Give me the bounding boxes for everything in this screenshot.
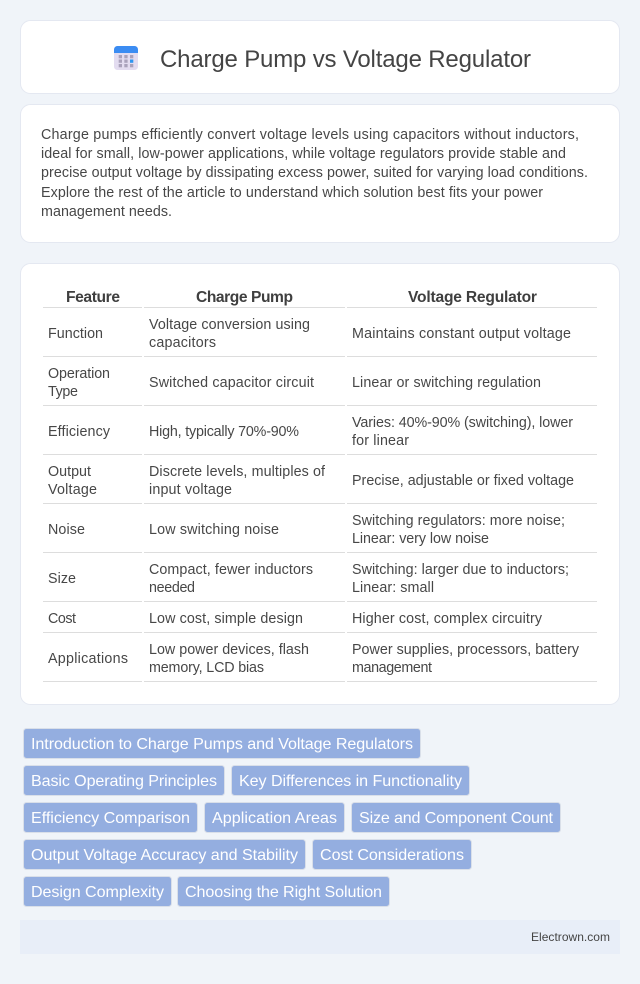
row: cost: Higher cost, complex circuitry — [352, 611, 543, 627]
tag: choosing the right solution — [178, 876, 390, 906]
row: cost: Low cost, simple design — [149, 611, 303, 627]
panel: header — [20, 20, 620, 94]
tag: design complexity — [24, 876, 172, 906]
tag: output voltage accuracy — [24, 840, 306, 870]
table header — [66, 289, 537, 306]
row: operation type — [48, 366, 541, 400]
intro paragraph: precise output voltage by dissipating excess power, suited for varying load conditions. — [41, 165, 588, 181]
tag: introduction: Introduction to Charge Pumps and Voltage Regulators — [31, 735, 413, 753]
row: output voltage: Precise, adjustable or fixed voltage — [352, 473, 574, 489]
row: function: Maintains constant output voltage — [352, 326, 571, 342]
intro paragraph: management needs. — [41, 204, 172, 220]
tag: cost considerations — [312, 840, 472, 870]
row: function: Voltage conversion using — [149, 317, 310, 333]
row: efficiency: Efficiency — [48, 424, 111, 440]
row: applications: management — [352, 660, 432, 676]
table header: Voltage Regulator — [408, 289, 537, 306]
table grid lines — [43, 307, 597, 682]
intro paragraph — [41, 127, 588, 220]
panel: intro text — [20, 104, 620, 242]
tag: size and component count: Size and Component Count — [359, 809, 554, 827]
row: function — [48, 317, 571, 351]
row: cost: Cost — [48, 611, 76, 627]
row: noise: Low switching noise — [149, 522, 279, 538]
row: efficiency: Varies: 40%-90% (switching), lower — [352, 415, 573, 431]
tag: key differences — [232, 766, 470, 796]
tag: application areas: Application Areas — [212, 809, 337, 827]
row: output voltage: Voltage — [48, 482, 97, 498]
row: noise — [48, 513, 565, 547]
row: output voltage: Output — [48, 464, 91, 480]
panel: comparison table — [20, 264, 620, 704]
tag: efficiency comparison — [24, 802, 198, 832]
row: size: Linear: small — [352, 580, 434, 596]
title: Charge Pump vs Voltage Regulator — [160, 46, 531, 73]
row: noise: Noise — [48, 522, 85, 538]
tag: output voltage accuracy: Output Voltage Accuracy and Stability — [31, 846, 299, 864]
tag: application areas — [204, 802, 344, 832]
row: operation type: Switched capacitor circuit — [149, 375, 314, 391]
row: size: Switching: larger due to inductors; — [352, 562, 569, 578]
row: output voltage: input voltage — [149, 482, 232, 498]
row: operation type: Type — [48, 384, 78, 400]
footer — [20, 920, 620, 954]
row: function: Function — [48, 326, 103, 342]
table header: Feature — [66, 289, 120, 306]
row: size: Size — [48, 571, 76, 587]
row: function: capacitors — [149, 335, 216, 351]
row: efficiency: High, typically 70%-90% — [149, 424, 299, 440]
row: size — [48, 562, 569, 596]
table header: Charge Pump — [196, 289, 293, 306]
icon: calendar — [114, 46, 138, 70]
intro paragraph: Charge pumps efficiently convert voltage levels using capacitors without inductors, — [41, 127, 579, 143]
row: noise: Linear: very low noise — [352, 531, 489, 547]
tag: basic operating principles — [24, 766, 224, 796]
intro paragraph: Explore the rest of the article to understand which solution best fits your power — [41, 185, 543, 201]
row: output voltage — [48, 464, 574, 498]
row: applications: memory, LCD bias — [149, 660, 264, 676]
panel: topic tags — [24, 728, 560, 906]
tag: key differences: Key Differences in Functionality — [239, 772, 463, 790]
row: operation type: Linear or switching regulation — [352, 375, 541, 391]
row: efficiency — [48, 415, 573, 449]
footer: Electrown.com — [531, 930, 610, 944]
row: size: Compact, fewer inductors — [149, 562, 313, 578]
row: output voltage: Discrete levels, multiples of — [149, 464, 325, 480]
tag: introduction — [24, 728, 420, 758]
tag: design complexity: Design Complexity — [31, 883, 165, 901]
row: applications: Low power devices, flash — [149, 642, 309, 658]
tag: efficiency comparison: Efficiency Comparison — [31, 809, 190, 827]
row: cost — [48, 611, 543, 627]
tag: cost considerations: Cost Considerations — [320, 846, 464, 864]
row: applications — [48, 642, 580, 676]
row: noise: Switching regulators: more noise; — [352, 513, 565, 529]
tag: size and component count — [352, 802, 560, 832]
tag: basic operating principles: Basic Operating Principles — [31, 772, 217, 790]
row: operation type: Operation — [48, 366, 110, 382]
tag: choosing the right solution: Choosing the Right Solution — [185, 883, 382, 901]
row: applications: Power supplies, processors, battery — [352, 642, 580, 658]
intro paragraph: ideal for small, low-power applications, while voltage regulators provide stable and — [41, 146, 566, 162]
row: applications: Applications — [48, 651, 128, 667]
row: efficiency: for linear — [352, 433, 409, 449]
row: size: needed — [149, 580, 195, 596]
